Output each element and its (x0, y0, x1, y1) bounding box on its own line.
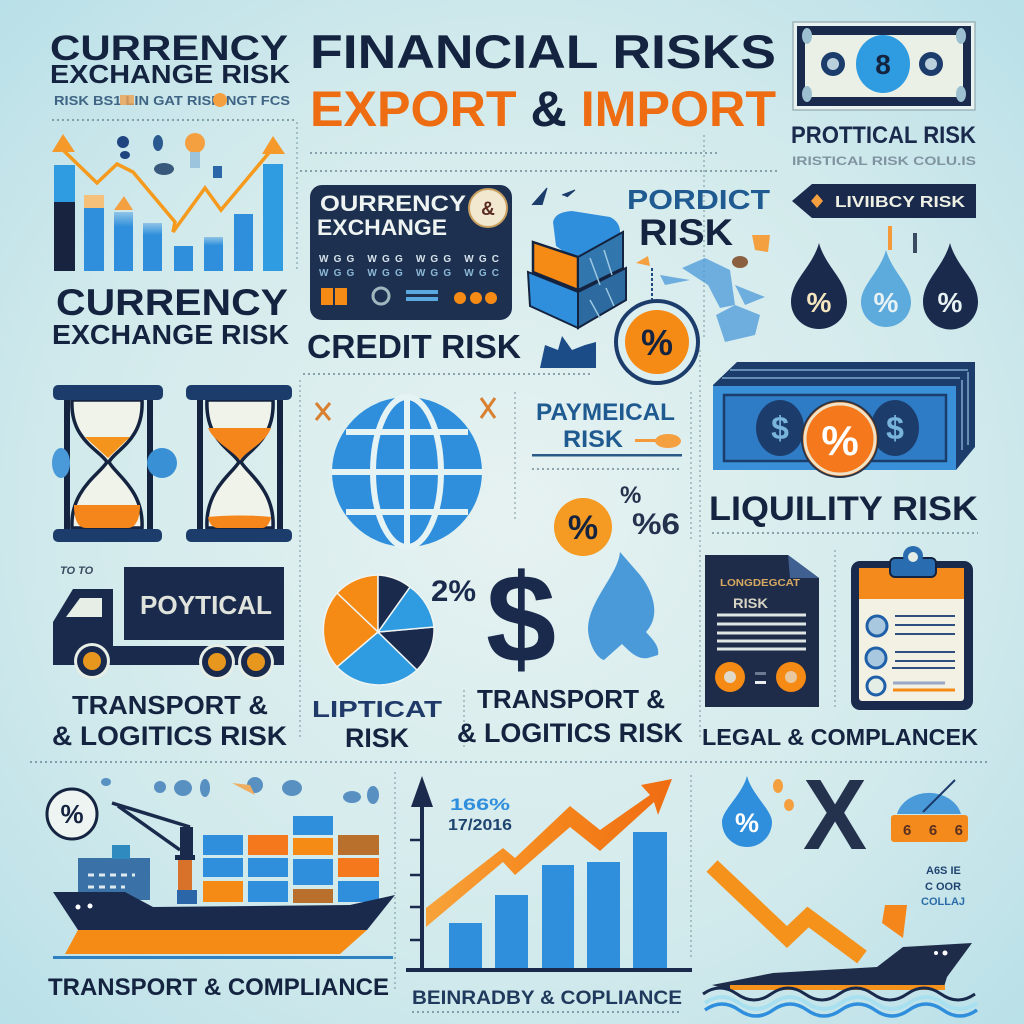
heading: paymerical risk: RISK (563, 426, 624, 453)
faded caption row right: IRISTICAL RISK COLU.IS (792, 154, 976, 168)
heading: transport and compliance: TRANSPORT & COMPLIANCE (48, 974, 389, 1001)
chart: growth bars with arrow: 17/2016 (448, 817, 512, 834)
heading: currency exchange risk (52, 282, 289, 350)
chart: pie (323, 575, 434, 685)
icon: dollar sign: $ (486, 548, 556, 689)
heading: credit risk: CREDIT RISK (307, 328, 521, 365)
heading: protical risk: PROTTICAL RISK (791, 122, 977, 149)
chart: falling arrow (712, 865, 965, 957)
heading: transport and logistics left (52, 690, 288, 751)
icon: ship on waves (703, 943, 977, 1016)
panel: currency exchange card: EXCHANGE (317, 215, 447, 240)
icon: banknote: 8 (875, 49, 891, 80)
heading: transport and logistics mid: TRANSPORT & (477, 684, 665, 714)
heading: product risk (627, 184, 770, 253)
heading: political risk mid: RISK (345, 723, 409, 753)
heading: political risk mid: LIPTICAT (312, 696, 442, 722)
icon: water drop (588, 552, 658, 660)
icon: legal document: RISK (733, 595, 768, 611)
heading: transport and logistics mid (457, 684, 683, 748)
icon: percent coin: % (568, 509, 598, 547)
heading: political risk mid (312, 696, 442, 753)
heading: currency exchange risk: CURRENCY (56, 282, 288, 323)
decorative orange specks (773, 779, 794, 811)
icon: percent coin: %6 (632, 508, 680, 541)
icons: liquidity drops: % (807, 287, 832, 318)
heading: paymerical risk (532, 399, 682, 456)
icon: legal document: LONGDEGCAT (720, 578, 800, 589)
title (310, 25, 776, 137)
label: percent: 2% (431, 575, 476, 608)
title: EXPORT & IMPORT (310, 81, 776, 137)
icon: banknote (793, 22, 975, 110)
icon: truck with political label: POYTICAL (140, 590, 272, 620)
icon: truck with political label: TO TO (60, 565, 94, 577)
chart: growth bars with arrow: 166% (450, 795, 510, 814)
heading: currency exchange risk top left: EXCHANGE RISK (50, 59, 290, 89)
icon: clipboard (851, 546, 973, 710)
faded caption row left: RISK BS1 LIN GAT RISK NGT FCS (54, 93, 290, 108)
icon: percent circle small: % (60, 799, 84, 829)
chart: falling arrow: C OOR (925, 881, 961, 893)
icon: percent badge (616, 268, 698, 383)
icon: legal document (705, 555, 819, 707)
chart: growth bars with arrow (406, 776, 692, 970)
chart: currency bars with line (52, 133, 285, 271)
panel: currency exchange card: OURRENCY (320, 191, 466, 216)
icon: orange tag with blue dome: 666 (903, 822, 963, 839)
icon: percent circle small (47, 789, 97, 839)
icon: stacked boxes (528, 188, 626, 328)
panel: currency exchange card: WGG WGG WGG WGC (319, 268, 499, 279)
icons: liquidity drops: % (938, 287, 963, 318)
icon: hourglass left (52, 385, 177, 542)
icon: blue map shards (660, 258, 765, 342)
icon: X mark: X (803, 759, 867, 871)
icon: cash stack: $ (886, 410, 904, 446)
chart: falling arrow: A6S IE (926, 865, 961, 877)
icon: container ship (53, 803, 395, 959)
heading: product risk: PORDICT (627, 184, 770, 215)
icon: small orange flags (636, 235, 770, 268)
heading: liquidity risk: LIQUILITY RISK (709, 490, 978, 528)
heading: paymerical risk: PAYMEICAL (536, 399, 675, 426)
icon: orange tag with blue dome (891, 780, 968, 842)
heading: currency exchange risk top left: CURRENCY (50, 29, 288, 68)
label: liquidity tag: LIVIIBCY RISK (835, 194, 966, 211)
icon: cash stack: $ (771, 410, 789, 446)
icon: globe (316, 397, 495, 547)
icon: percent coin: % (620, 482, 641, 509)
heading: product risk: RISK (639, 212, 733, 253)
panel: currency exchange card: & (481, 199, 495, 220)
icons: liquidity drops (791, 226, 978, 330)
icon: cash stack (713, 362, 975, 477)
icon: truck with political label (53, 565, 284, 680)
icon: small skyline (540, 336, 596, 368)
heading: bottom center compliance: BEINRADBY & COPLIANCE (412, 988, 682, 1009)
heading: currency exchange risk: EXCHANGE RISK (52, 319, 289, 350)
icon: percent badge: % (641, 322, 673, 363)
heading: transport and logistics mid: & LOGITICS RISK (457, 718, 683, 748)
panel: currency exchange card: WGG WGG WGG WGC (319, 254, 499, 265)
icon: blue drop percent (722, 776, 772, 847)
panel: currency exchange card (310, 185, 512, 320)
title: FINANCIAL RISKS (310, 25, 776, 78)
icon: blue drop percent: % (735, 808, 759, 838)
icons: liquidity drops: % (874, 287, 899, 318)
decorative smudges above ship (101, 777, 379, 804)
heading: transport and logistics left: TRANSPORT & (72, 690, 268, 720)
heading: currency exchange risk top left (50, 29, 290, 89)
icon: hourglass right (186, 385, 292, 542)
heading: legal and compliance: LEGAL & COMPLANCEK (702, 724, 978, 750)
icon: percent coin (554, 482, 680, 556)
label: liquidity tag (792, 184, 976, 218)
chart: falling arrow: COLLAJ (921, 896, 965, 908)
icon: cash stack: % (821, 417, 859, 464)
heading: transport and logistics left: & LOGITICS RISK (52, 721, 288, 751)
